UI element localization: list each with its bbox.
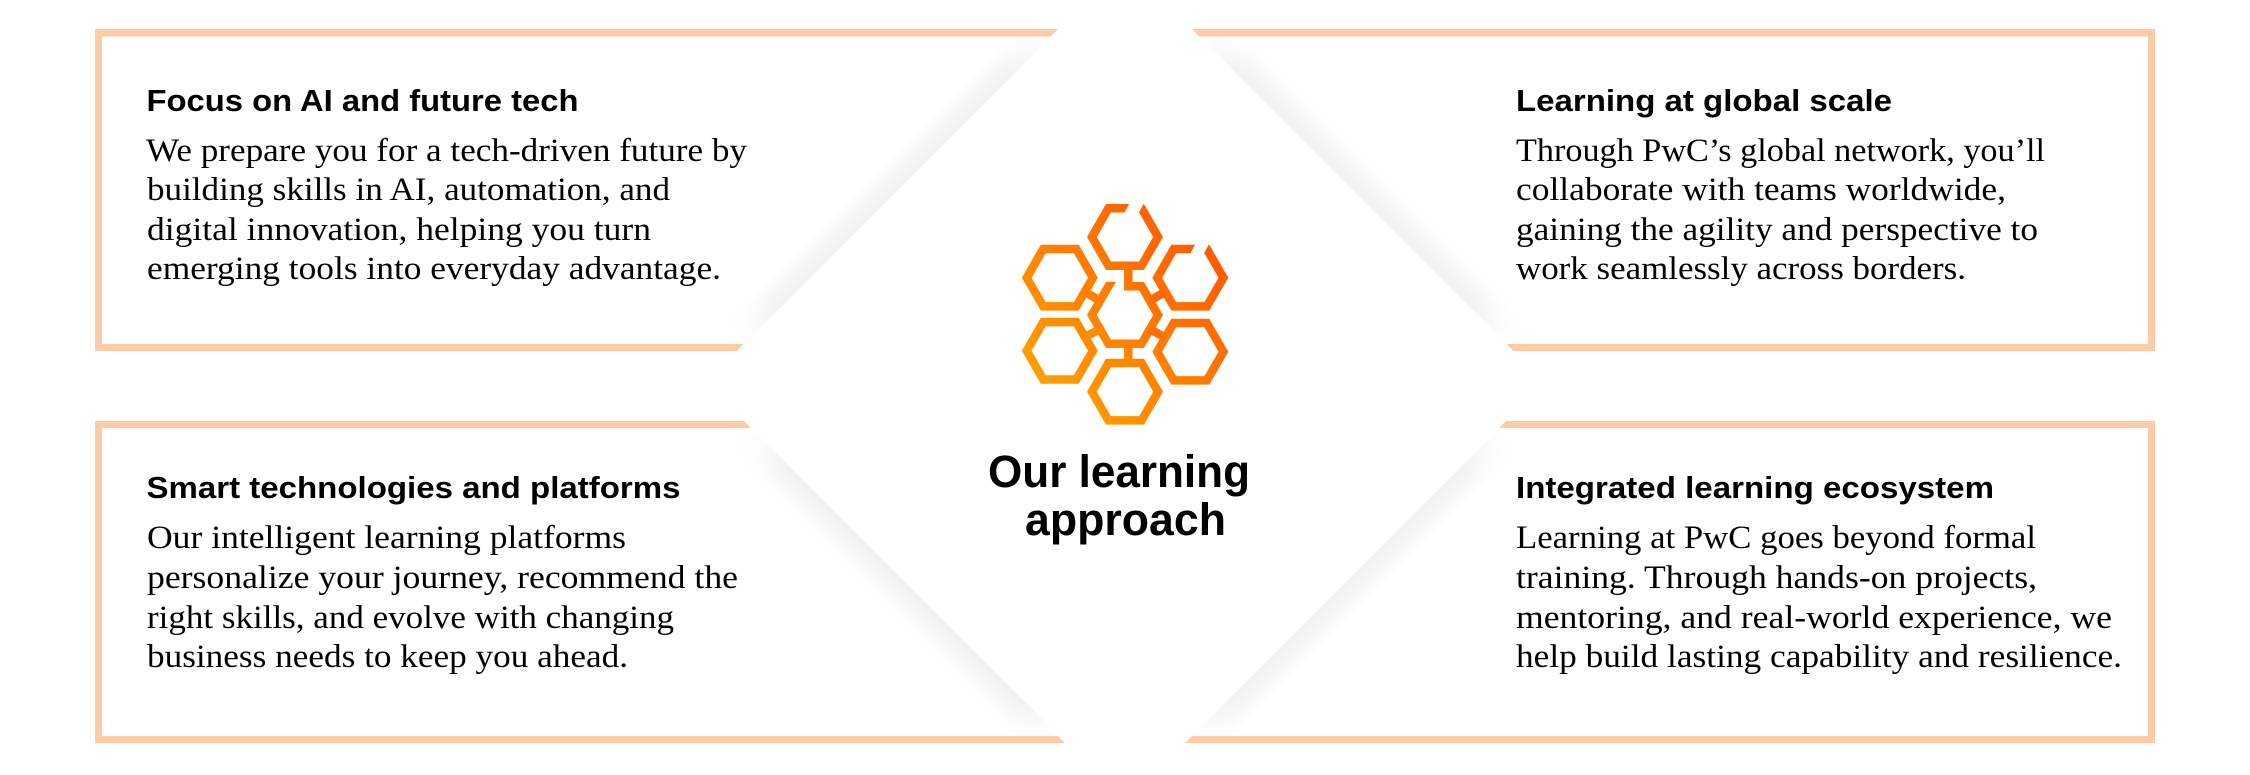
body text: training. Through hands-on projects, [1516, 560, 2037, 596]
hexagon: upper right, with gap [1157, 243, 1223, 306]
panel frame [1192, 29, 2155, 351]
hexagon: lower right [1157, 323, 1223, 380]
panel frame [95, 421, 1065, 743]
body text: building skills in AI, automation, and [147, 172, 671, 208]
body text: Through PwC’s global network, you’ll [1516, 133, 2045, 169]
icon: connected hexagons [1027, 202, 1223, 420]
body text: personalize your journey, recommend the [147, 560, 738, 596]
diagonal shadow [1214, 452, 1476, 714]
body text: business needs to keep you ahead. [147, 639, 628, 675]
body text: work seamlessly across borders. [1516, 251, 1966, 287]
body text [147, 520, 738, 675]
body text: We prepare you for a tech-driven future by [146, 133, 748, 169]
body text: emerging tools into everyday advantage. [147, 251, 721, 287]
body text [1516, 133, 2045, 287]
diagonal shadow [1224, 60, 1486, 322]
body text: right skills, and evolve with changing [147, 600, 674, 636]
panel: focus on AI and future tech [95, 29, 1058, 351]
hexagon: upper left [1027, 249, 1093, 306]
body text: mentoring, and real-world experience, we [1516, 600, 2112, 636]
title: Our learning [988, 446, 1250, 497]
diagonal shadow [774, 452, 1036, 714]
hexagon: lower left [1027, 322, 1093, 380]
heading: Learning at global scale [1516, 83, 1892, 118]
body text: Our intelligent learning platforms [147, 520, 626, 556]
hexagon: centre, open at top left [1092, 277, 1158, 344]
heading: Smart technologies and platforms [146, 470, 680, 505]
body text: collaborate with teams worldwide, [1516, 172, 2006, 208]
panel: smart technologies and platforms [95, 421, 1065, 743]
diagonal shadow [765, 60, 1026, 322]
body text: gaining the agility and perspective to [1516, 212, 2038, 248]
hexagon: bottom [1092, 363, 1158, 420]
hexagon: top, with gap [1092, 202, 1158, 266]
body text: help build lasting capability and resilience. [1516, 639, 2122, 675]
panel frame [95, 29, 1058, 351]
body text: Learning at PwC goes beyond formal [1516, 520, 2036, 556]
body text [146, 133, 748, 287]
body text: digital innovation, helping you turn [147, 212, 651, 248]
title [988, 446, 1250, 545]
heading: Focus on AI and future tech [146, 83, 578, 118]
panel frame [1185, 421, 2155, 743]
heading: Integrated learning ecosystem [1516, 470, 1994, 505]
connectors between hexagons [1085, 265, 1165, 364]
panel: learning at global scale [1192, 29, 2155, 351]
body text [1516, 520, 2122, 675]
title: approach [1025, 494, 1226, 545]
panel: integrated learning ecosystem [1185, 421, 2155, 743]
